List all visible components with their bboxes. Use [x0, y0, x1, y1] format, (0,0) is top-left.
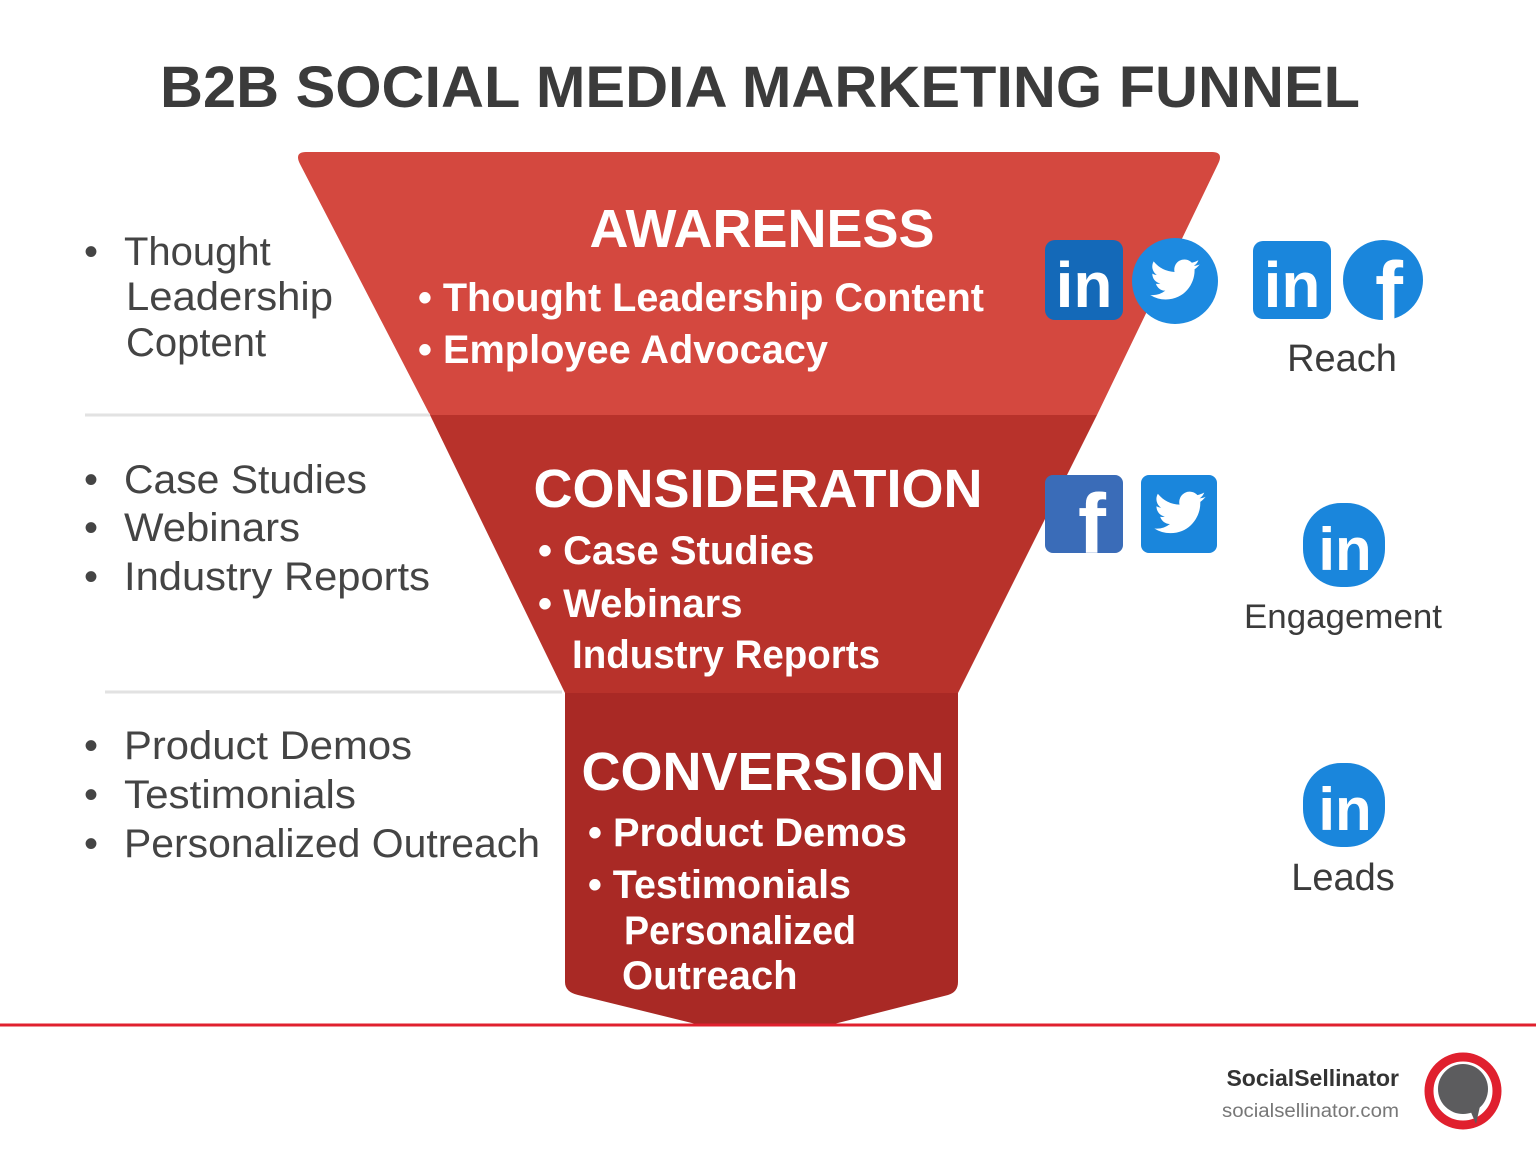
- left list: conversion: •: [84, 773, 98, 817]
- brand text: [1222, 1065, 1399, 1122]
- label: reach: Reach: [1287, 338, 1397, 380]
- funnel stage: conversion: • Testimonials: [588, 863, 851, 907]
- funnel stage: awareness: [298, 152, 1220, 415]
- icons: awareness: in: [1264, 249, 1320, 321]
- funnel stage: awareness: • Thought Leadership Content: [418, 276, 984, 320]
- left list: conversion: [84, 724, 540, 866]
- brand text: socialsellinator.com: [1222, 1101, 1399, 1122]
- left list: awareness: [84, 230, 333, 365]
- left list: consideration: •: [84, 458, 98, 502]
- funnel stage: consideration: Industry Reports: [572, 633, 880, 677]
- icons: consideration: [1045, 475, 1217, 571]
- icons: awareness: f: [1375, 245, 1404, 339]
- left list: conversion: Product Demos: [124, 724, 412, 768]
- funnel stage: conversion: CONVERSION: [581, 742, 945, 802]
- icons: awareness: [1045, 238, 1423, 339]
- label: leads: Leads: [1291, 857, 1395, 899]
- left list: consideration: •: [84, 555, 98, 599]
- funnel stage: consideration: • Case Studies: [538, 529, 814, 573]
- funnel stage: conversion: • Product Demos: [588, 811, 907, 855]
- left list: consideration: Case Studies: [124, 458, 367, 502]
- left list: awareness: Coptent: [126, 321, 266, 365]
- funnel stage: awareness: • Employee Advocacy: [418, 328, 829, 372]
- brand text: SocialSellinator: [1226, 1065, 1399, 1091]
- funnel stage: conversion: Outreach: [622, 954, 798, 998]
- icon: linkedin engagement: in: [1318, 516, 1372, 583]
- funnel: [298, 152, 1220, 1025]
- icon: linkedin engagement: [1303, 503, 1385, 587]
- title: B2B SOCIAL MEDIA MARKETING FUNNEL: [160, 55, 1360, 120]
- funnel stage: awareness: AWARENESS: [589, 199, 935, 259]
- funnel stage: consideration: [430, 415, 1097, 693]
- funnel stage: consideration: CONSIDERATION: [533, 459, 983, 519]
- left list: consideration: [84, 458, 430, 599]
- icon: linkedin leads: [1303, 763, 1385, 847]
- left list: conversion: •: [84, 724, 98, 768]
- left list: awareness: Thought: [124, 230, 271, 274]
- icons: consideration: f: [1078, 477, 1107, 571]
- left list: consideration: •: [84, 506, 98, 550]
- left list: awareness: Leadership: [126, 275, 333, 319]
- label: engagement: Engagement: [1244, 598, 1443, 636]
- left list: consideration: Webinars: [124, 506, 300, 550]
- funnel stage: consideration: • Webinars: [538, 582, 742, 626]
- logo: [1429, 1057, 1497, 1125]
- left list: consideration: Industry Reports: [124, 555, 430, 599]
- left list: conversion: •: [84, 822, 98, 866]
- left list: conversion: Testimonials: [124, 773, 356, 817]
- funnel stage: conversion: Personalized: [624, 909, 856, 953]
- icon: linkedin leads: in: [1318, 776, 1372, 843]
- left list: awareness: •: [84, 230, 98, 274]
- icons: awareness: in: [1056, 249, 1112, 321]
- left list: conversion: Personalized Outreach: [124, 822, 540, 866]
- funnel stage: conversion: [565, 693, 958, 1025]
